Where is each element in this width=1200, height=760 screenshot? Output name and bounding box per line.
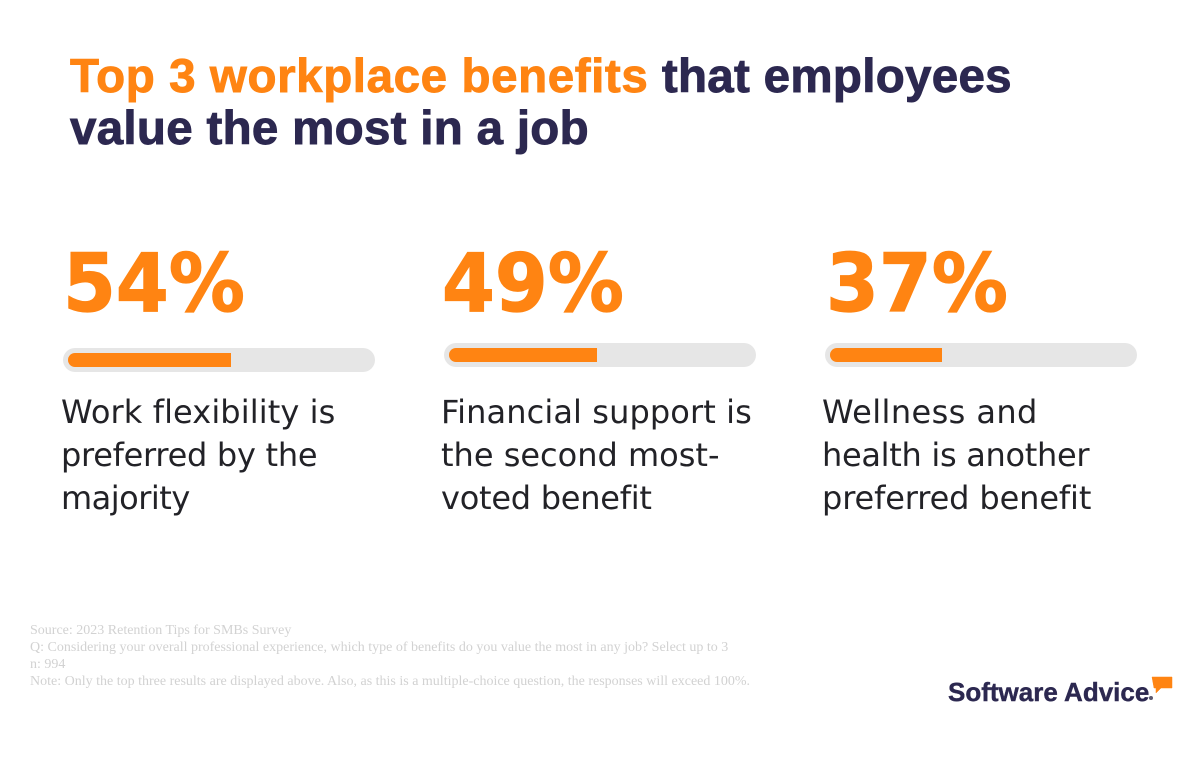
progress bar: 54% bbox=[63, 348, 375, 372]
source notes: n: 994 bbox=[30, 657, 65, 672]
logo: Software Advice bbox=[948, 676, 1172, 707]
description: wellness and health: Wellness and bbox=[822, 393, 1038, 431]
title: value the most in a job bbox=[70, 102, 589, 155]
stat: 49%: 49% bbox=[442, 237, 624, 330]
description: work flexibility bbox=[61, 393, 335, 517]
title bbox=[70, 50, 1012, 155]
source notes: Source: 2023 Retention Tips for SMBs Survey bbox=[30, 623, 291, 638]
description: work flexibility: preferred by the bbox=[61, 436, 317, 474]
stat: 54%: 54% bbox=[63, 237, 245, 330]
panel: work flexibility bbox=[61, 237, 375, 517]
source notes: Note: Only the top three results are displayed above. Also, as this is a multiple-choice question, the responses will exceed 100%. bbox=[30, 674, 750, 689]
description: wellness and health bbox=[822, 393, 1091, 517]
source notes bbox=[30, 623, 750, 689]
source notes: Q: Considering your overall professional experience, which type of benefits do you value the most in any job? Select up to 3 bbox=[30, 640, 728, 655]
description: financial support: the second most- bbox=[441, 436, 720, 474]
description: wellness and health: preferred benefit bbox=[822, 479, 1091, 517]
panel: financial support bbox=[441, 237, 756, 517]
description: financial support: Financial support is bbox=[441, 393, 752, 431]
progress bar: 49% bbox=[444, 343, 756, 367]
description: work flexibility: majority bbox=[61, 479, 190, 517]
progress bar: 37% bbox=[825, 343, 1137, 367]
panel: wellness and health bbox=[822, 237, 1137, 517]
stat: 37%: 37% bbox=[826, 237, 1008, 330]
logo wordmark: Software Advice bbox=[948, 677, 1149, 707]
icon: registered dot bbox=[1149, 696, 1153, 700]
description: financial support: voted benefit bbox=[441, 479, 652, 517]
description: wellness and health: health is another bbox=[822, 436, 1089, 474]
icon: speech bubble bbox=[1152, 676, 1172, 693]
description: work flexibility: Work flexibility is bbox=[61, 393, 335, 431]
title: Top 3 workplace benefits that employees bbox=[70, 50, 1012, 103]
description: financial support bbox=[441, 393, 752, 517]
